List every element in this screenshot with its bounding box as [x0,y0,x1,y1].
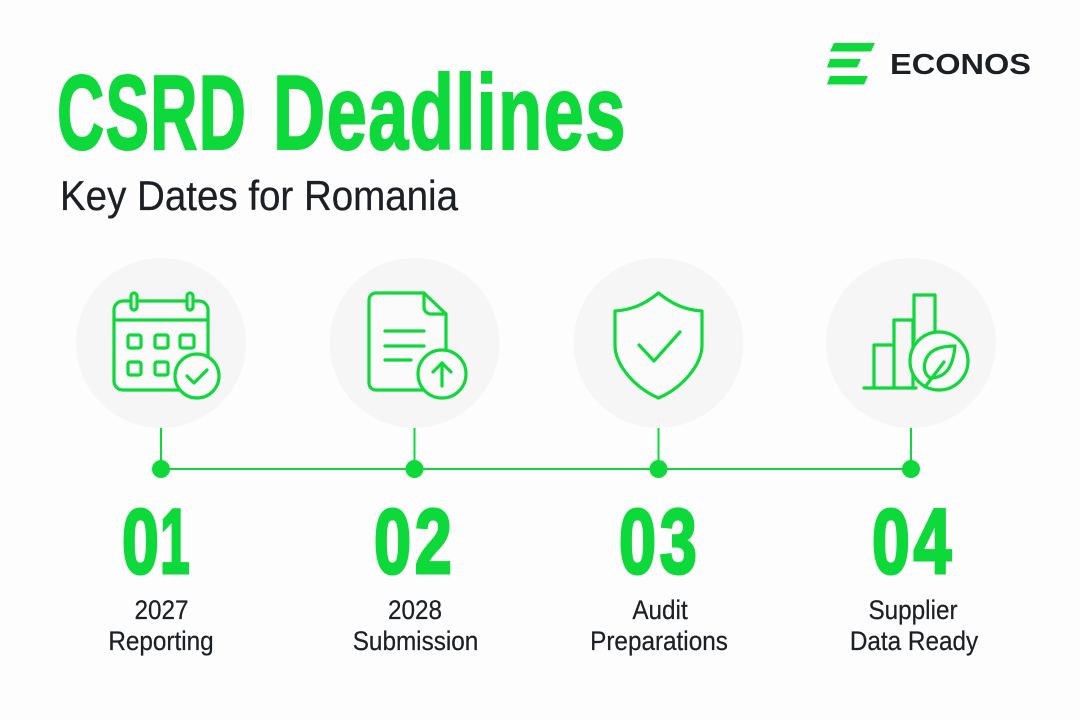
step number 1 [122,489,190,593]
step marker 4 [902,460,920,478]
logo mark [827,43,875,84]
step 1: 2027 Reporting [76,258,246,656]
step 2: 2028 Submission [330,258,500,656]
icon backdrop 2 [330,258,500,428]
title [57,53,627,172]
timeline connector [161,420,911,469]
icon: document with upload [369,293,466,398]
title: Deadlines [273,54,627,172]
step number 1: 0 [122,489,159,593]
step label 1: 2027 [134,596,189,625]
icon backdrop 3 [574,258,744,428]
icon backdrop 1 [76,258,246,428]
icon: bar chart with leaf [864,295,968,390]
icon: shield with check [615,293,702,398]
step label 3 [590,596,728,656]
step label 2: Submission [353,627,478,656]
step 3: Audit Preparations [574,258,744,656]
step label 4 [850,596,978,656]
step 4: Supplier Data Ready [826,258,996,656]
icon: calendar with check [114,293,219,398]
step label 2: 2028 [388,596,442,625]
logo wordmark: ECONOS [890,49,1031,81]
step label 4: Data Ready [850,627,978,656]
step label 2 [353,596,478,656]
logo: Econos [827,43,1031,84]
step marker 3 [650,460,668,478]
step number 4: 04 [872,491,955,593]
icon backdrop 4 [826,258,996,428]
step label 1 [108,596,214,656]
step label 3: Preparations [590,627,728,656]
step number 3: 03 [619,491,700,594]
step label 1: Reporting [108,627,214,656]
title: CSRD [57,53,247,172]
step marker 2 [406,460,424,478]
step number 2: 02 [374,491,455,594]
step marker 1 [152,460,170,478]
step number 1: 1 [160,490,190,593]
subtitle: Key Dates for Romania [60,172,459,219]
step label 4: Supplier [868,596,958,625]
step label 3: Audit [632,596,688,625]
